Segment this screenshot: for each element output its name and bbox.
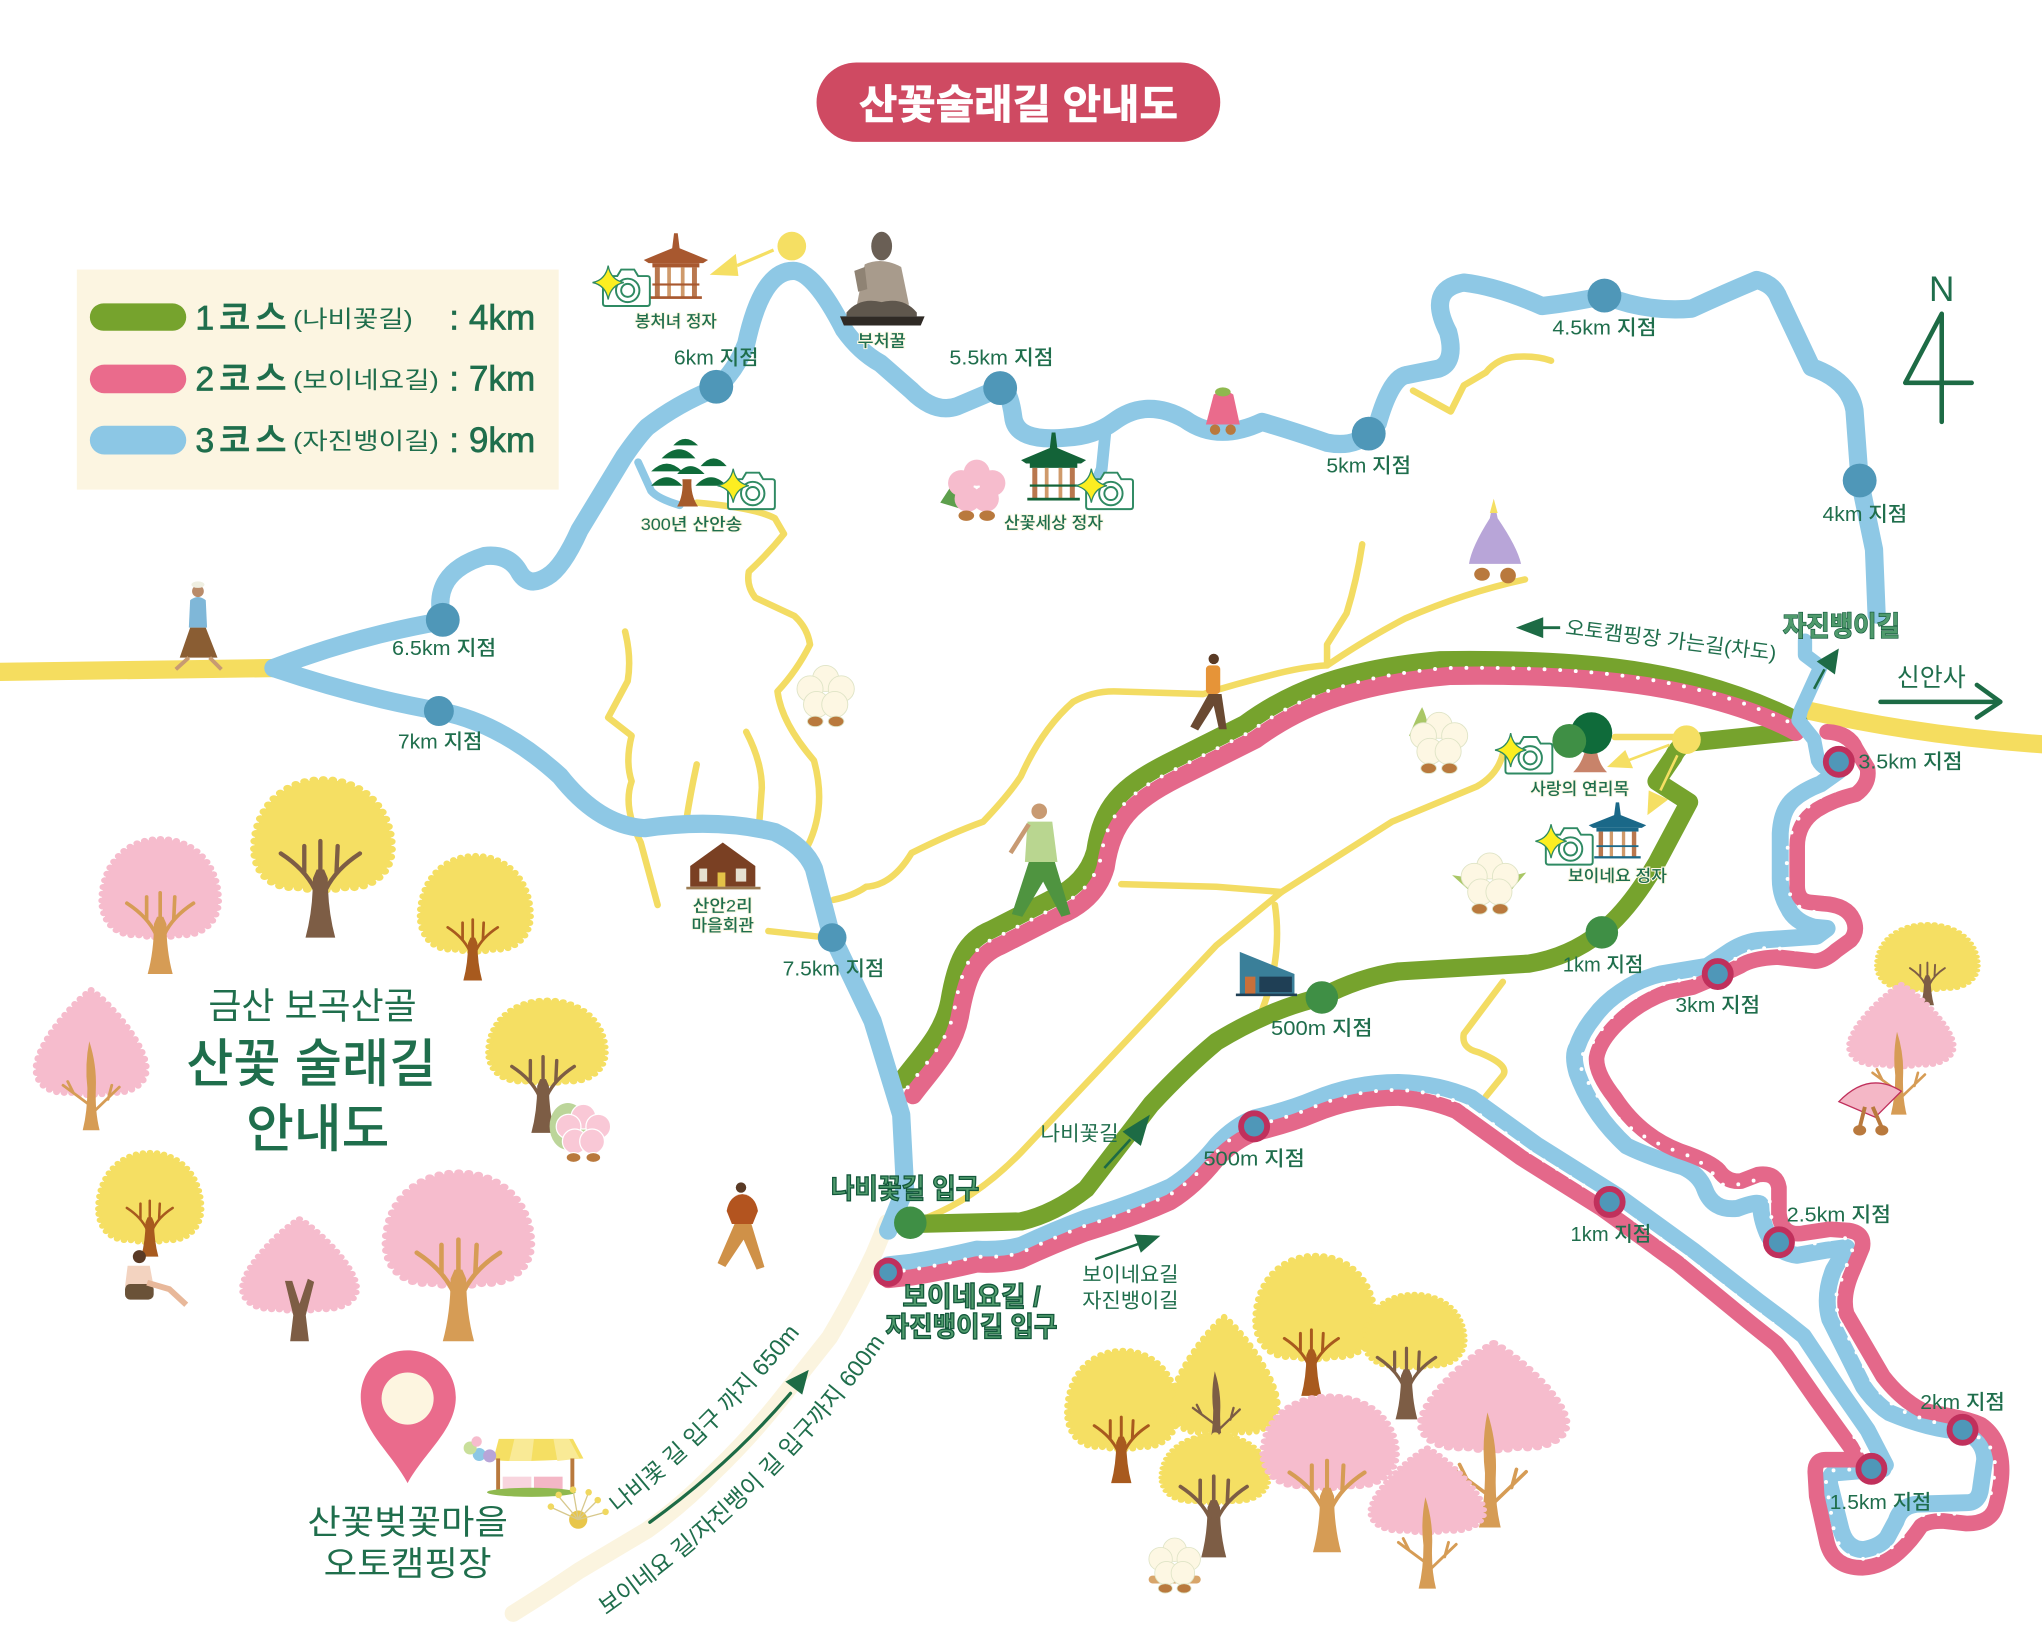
icon: purple flower character [1469,499,1521,583]
label: Boinaeyo road: 보이네요길 [1082,1263,1179,1286]
icon: couple tree at Sarang [1552,712,1612,772]
icon: village hall house [686,843,761,889]
course 1 route: green upper [902,660,1798,1080]
icon: camera at green pavilion [1076,469,1133,509]
label: 4.5km: 4.5km 지점 [1552,317,1657,340]
label: Buddha valley: 부처꿀 [858,332,906,350]
icon: pink flower character beside tree [550,1103,611,1162]
label: Jajinbaengi road small: 자진뱅이길 [1082,1289,1179,1312]
icon: dandelion character [548,1486,609,1529]
label: Jajinbaengi road: 자진뱅이길 [1783,610,1900,641]
label: love tree: 사랑의 연리목 [1530,780,1629,798]
legend panel: (나비꽃길) [293,306,413,332]
icon: camera at blue pavilion [1535,824,1593,865]
label: 2.5km: 2.5km 지점 [1787,1203,1891,1226]
legend panel: (보이네요길) [293,367,439,393]
north compass [1905,270,1972,422]
icon: brown walker [718,1182,764,1270]
label: course 2 500m: 500m 지점 [1203,1147,1305,1170]
label: 4km: 4km 지점 [1823,503,1907,526]
icon: camera at pavilion [593,266,650,306]
label: 300 year pine: 300년 산안송 [641,516,742,534]
icon: white flower character north [797,665,854,727]
trees: west circle [36,780,605,1341]
course 2 waypoints [876,749,1976,1482]
label: course 1 1km: 1km 지점 [1563,953,1643,976]
main heading: Geumsan Bogok: 금산 보곡산골 [208,985,417,1026]
yellow side roads [608,357,1685,1218]
icon: market stall [464,1436,583,1497]
legend panel: (자진뱅이길) [293,428,439,454]
icon: white flower character in grove [1149,1538,1201,1593]
trees: south grove [1067,1256,1566,1589]
label: course 2 1km: 1km 지점 [1571,1223,1651,1246]
icon: fan flower character [1839,1083,1901,1135]
label: 1.5km: 1.5km 지점 [1830,1491,1931,1514]
label: Sanan 2-ri: 산안2리 [693,898,753,916]
arrow: Nabi road [1104,1115,1150,1168]
trees: east [1849,924,1978,1115]
label: Nabi road: 나비꽃길 [1041,1123,1119,1146]
legend panel: 2 코 스 [195,361,287,399]
yellow viewpoint markers [710,232,1701,815]
arrow: to Sinansa [1881,685,2000,718]
cream access road [513,1223,887,1613]
label: Jajinbaengi entrance: 자진뱅이길 입구 [886,1311,1057,1342]
course 2/3 eastern loop [1574,732,2002,1568]
label: Bongcheonyeo pavilion: 봉처녀 정자 [635,313,717,331]
icon: orange walker [1190,654,1227,731]
legend panel: : 9km [449,421,535,460]
dotted centerline upper [908,668,1804,1087]
icon: blue pavilion [1589,802,1646,858]
icon: pink flower character at pavilion [940,460,1005,521]
label: Sankkot world pavilion: 산꽃세상 정자 [1004,515,1103,533]
icon: location pin [361,1350,456,1483]
arrow: to Nabi entrance [650,1370,809,1522]
label: village hall: 마을회관 [692,917,754,935]
icon: pine tree [651,439,727,507]
arrow: to auto camping [1516,617,1560,638]
arrow: Jajinbaengi direction [1814,648,1839,689]
label: distance 600m along road: 보이네요 길/자진뱅이 길 입구까지 600m [598,1337,884,1614]
icon: walking woman with skirt [176,581,221,669]
course 3 route: blue main [273,271,1877,1231]
icon: camera at couple tree [1495,733,1552,773]
icon: small teal building [1236,952,1297,996]
label: 3.5km: 3.5km 지점 [1858,750,1963,773]
course 1 route: green lower [910,732,1793,1224]
label: Boinaeyo entrance: 보이네요길 / [902,1281,1041,1312]
legend panel: : 7km [449,360,535,399]
arrow: Boinaeyo road [1095,1234,1160,1259]
label: 2km: 2km 지점 [1920,1391,2005,1414]
course 3 waypoints [424,279,1877,952]
label: Boinaeyo pavilion: 보이네요 정자 [1568,868,1667,886]
icon: green pavilion [1021,432,1086,501]
main road east to Sinansa [1810,711,2042,745]
label: 7.5km: 7.5km 지점 [783,957,884,980]
legend panel: : 4km [449,298,535,337]
icon: pink bell character [1206,387,1240,435]
legend panel: 1 코 스 [195,299,287,337]
course 2/3 shared lower section [888,1082,1886,1465]
course 1 waypoints [894,916,1618,1239]
label: 6km: 6km 지점 [674,347,759,370]
campground name second line: 오토캠핑장 [324,1546,492,1584]
label: Nabi entrance: 나비꽃길 입구 [831,1173,979,1204]
label: distance 650m along road: 나비꽃 길 입구 까지 650m [608,1327,800,1510]
main heading: guide map: 안내도 [246,1101,389,1159]
label: 5km: 5km 지점 [1326,455,1411,478]
label: 5.5km: 5.5km 지점 [949,347,1054,370]
label: Sinansa: 신안사 [1897,664,1966,692]
north compass: N [1929,270,1954,309]
label: to auto camping: 오토캠핑장 가는길(차도) [1564,616,1778,665]
label: course 1 500m: 500m 지점 [1271,1017,1373,1040]
label: 7km: 7km 지점 [398,731,483,754]
icon: brown pavilion [644,233,708,299]
label: 6.5km: 6.5km 지점 [392,637,496,660]
campground name: 산꽃벚꽃마을 [307,1504,508,1542]
title banner: 산꽃술래길 안내도 [859,81,1178,127]
icon: hiker with green shirt [1011,803,1070,917]
icon: white flower character with leaf [1409,707,1468,773]
legend panel [77,270,559,490]
icon: white flower character with wings [1452,853,1526,914]
main road west [0,668,276,672]
icon: camera at pine [718,469,775,509]
course 2 route: pink upper [913,676,1796,1095]
label: 3km: 3km 지점 [1675,994,1760,1017]
title banner [817,63,1220,142]
main heading: Sankkot Sullaegil: 산꽃 술래길 [186,1036,436,1094]
icon: seated person [125,1250,186,1305]
icon: Buddha statue [840,232,925,326]
legend panel: 3 코 스 [195,422,287,460]
